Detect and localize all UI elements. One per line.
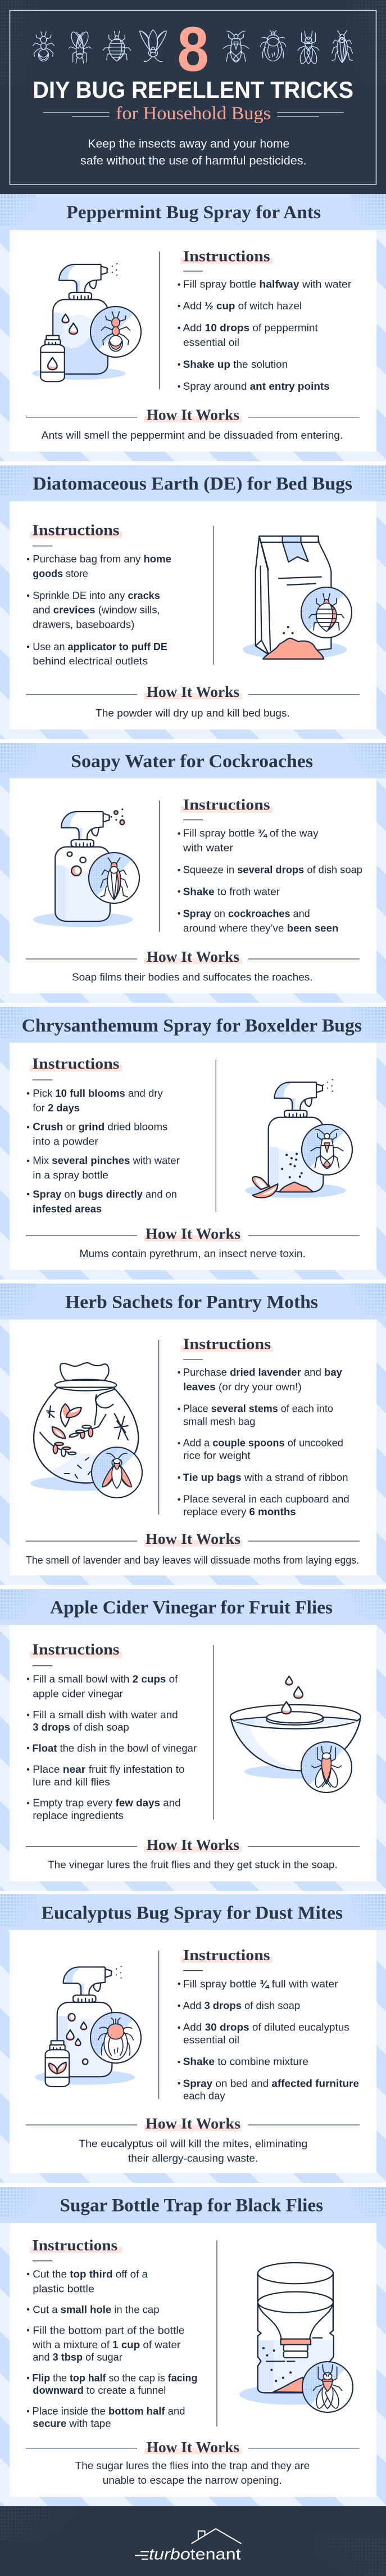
instructions block: each day — [183, 2090, 225, 2102]
instructions block: plastic bottle — [33, 2282, 94, 2294]
instructions block: small mesh bag — [183, 1415, 255, 1427]
instructions block: Fill a small bowl with 2 cups of — [33, 1673, 178, 1685]
instructions block: Spray on bed and affected furniture — [183, 2077, 359, 2089]
instructions block: Add ½ cup of witch hazel — [183, 300, 302, 312]
how it works: Ants will smell the peppermint and be dissuaded from entering. — [42, 429, 343, 441]
how it works: How It Works — [147, 2438, 239, 2456]
instructions block: Add 10 drops of peppermint — [183, 322, 319, 334]
instructions block: behind electrical outlets — [33, 655, 148, 667]
instructions block: Fill a small dish with water and — [33, 1709, 178, 1721]
instructions block: Spray on bugs directly and on — [33, 1188, 177, 1200]
instructions block — [28, 2236, 197, 2429]
instructions block: Spray on cockroaches and — [183, 907, 310, 919]
instructions block: Fill spray bottle ¾ full with water — [183, 1978, 338, 1989]
how it works: How It Works — [147, 948, 239, 965]
instructions block: lure and kill flies — [33, 1776, 110, 1787]
instructions block: downward to create a funnel — [33, 2384, 166, 2396]
instructions block: 3 drops of dish soap — [33, 1721, 129, 1733]
instructions block: Mix several pinches with water — [33, 1155, 180, 1167]
instructions block: replace ingredients — [33, 1809, 124, 1821]
instructions block: Place near fruit fly infestation to — [33, 1763, 185, 1775]
how it works: How It Works — [146, 1225, 240, 1242]
panel: eucalyptus spray for dust mites — [0, 1894, 386, 2183]
icon row: bugs — [33, 30, 352, 64]
instructions block: goods store — [33, 568, 88, 579]
illustration: bag of DE and bed bug — [243, 536, 352, 659]
illustration: spray bottle and ant — [32, 264, 141, 381]
instructions block: for 2 days — [33, 1102, 80, 1114]
instructions block: Purchase bag from any home — [33, 553, 171, 565]
panel: sugar bottle trap for black flies — [0, 2187, 386, 2506]
instructions block: Squeeze in several drops of dish soap — [183, 864, 362, 876]
how it works: The sugar lures the flies into the trap and they are — [75, 2460, 310, 2471]
title: DIY BUG REPELLENT TRICKS — [33, 76, 353, 103]
instructions block: Fill spray bottle halfway with water — [183, 278, 351, 290]
instructions block: around where they’ve been seen — [183, 922, 338, 934]
intro text: Keep the insects away and your home — [88, 137, 289, 150]
instructions block: Add 3 drops of dish soap — [183, 1999, 300, 2011]
instructions block: Shake up the solution — [183, 358, 288, 370]
instructions block: Shake to combine mixture — [183, 2056, 308, 2068]
how it works: Mums contain pyrethrum, an insect nerve toxin. — [80, 1248, 306, 1259]
panel: peppermint spray for ants — [0, 194, 386, 461]
instructions block: replace every 6 months — [183, 1506, 296, 1517]
illustration: bottle trap and black fly — [239, 2263, 353, 2412]
how it works: unable to escape the narrow opening. — [103, 2474, 282, 2486]
footer panel — [0, 2506, 386, 2576]
instructions block: and 3 tbsp of sugar — [33, 2351, 122, 2363]
how it works: The smell of lavender and bay leaves will dissuade moths from laying eggs. — [26, 1554, 359, 1566]
how it works: How It Works — [147, 406, 239, 424]
how it works: The eucalyptus oil will kill the mites, eliminating — [79, 2138, 307, 2150]
instructions block: apple cider vinegar — [33, 1687, 123, 1699]
instructions block: with a mixture of 1 cup of water — [32, 2339, 180, 2350]
section heading: Diatomaceous Earth (DE) for Bed Bugs — [33, 474, 352, 494]
instructions block: Tie up bags with a strand of ribbon — [183, 1471, 348, 1483]
instructions block — [28, 1055, 180, 1214]
intro text: safe without the use of harmful pesticides. — [80, 155, 307, 168]
how it works: How It Works — [146, 2114, 240, 2132]
subtitle with rules — [43, 103, 344, 124]
section heading: Chrysanthemum Spray for Boxelder Bugs — [22, 1016, 362, 1036]
how it works: How It Works — [147, 683, 239, 700]
instructions block — [179, 1335, 349, 1517]
instructions block: into a powder — [33, 1136, 98, 1147]
instructions block: essential oil — [183, 336, 239, 348]
subtitle with rules: for Household Bugs — [116, 103, 271, 124]
illustration: soap bottle and cockroach — [33, 809, 139, 927]
how it works — [26, 1836, 360, 1871]
instructions block: rice for weight — [183, 1449, 251, 1461]
instructions block: in a spray bottle — [33, 1169, 108, 1181]
instructions block: Float the dish in the bowl of vinegar — [32, 1742, 197, 1754]
instructions block: Crush or grind dried blooms — [33, 1121, 167, 1133]
instructions block: Add a couple spoons of uncooked — [183, 1437, 343, 1449]
instructions block — [179, 247, 351, 392]
instructions block: Cut a small hole in the cap — [33, 2303, 159, 2315]
instructions block: essential oil — [183, 2034, 239, 2046]
logo: turbotenant — [135, 2529, 242, 2563]
panel: herb sachets for pantry moths — [0, 1284, 386, 1585]
instructions block: Shake to froth water — [183, 885, 280, 897]
panel: apple cider vinegar for fruit flies — [0, 1589, 386, 1891]
instructions block: Instructions — [183, 795, 270, 813]
big number 8: 8 — [178, 14, 209, 84]
section heading: Herb Sachets for Pantry Moths — [65, 1292, 318, 1312]
instructions block — [179, 1946, 359, 2102]
how it works: their allergy-causing waste. — [128, 2152, 258, 2164]
panel: soapy water for cockroaches — [0, 743, 386, 1003]
instructions block: Instructions — [183, 1946, 270, 1963]
instructions block: secure with tape — [33, 2417, 111, 2429]
illustration: herb sachet and moth — [30, 1363, 142, 1498]
how it works: How It Works — [146, 1530, 240, 1547]
panel: chrysanthemum spray for boxelder bugs — [0, 1007, 386, 1280]
instructions block: Instructions — [32, 521, 120, 539]
how it works: The powder will dry up and kill bed bugs. — [96, 707, 290, 719]
how it works — [26, 2114, 360, 2164]
instructions block: Instructions — [32, 2236, 117, 2254]
panel: diatomaceous earth for bed bugs — [0, 465, 386, 739]
section heading: Soapy Water for Cockroaches — [71, 751, 313, 772]
instructions block: Instructions — [183, 247, 270, 264]
instructions block: Fill the bottom part of the bottle — [33, 2324, 185, 2336]
how it works — [26, 1225, 360, 1259]
how it works — [26, 406, 360, 441]
instructions block: Add 30 drops of diluted eucalyptus — [183, 2021, 349, 2033]
how it works: Soap films their bodies and suffocates the roaches. — [72, 971, 312, 983]
instructions block: Place several in each cupboard and — [183, 1493, 349, 1505]
instructions block: Instructions — [183, 1335, 271, 1352]
illustration: bowl of vinegar and fruit fly — [230, 1676, 361, 1793]
instructions block: Empty trap every few days and — [33, 1797, 181, 1809]
instructions block: Instructions — [32, 1055, 120, 1072]
instructions block: Cut the top third off of a — [33, 2268, 148, 2280]
instructions block: Flip the top half so the cap is facing — [32, 2372, 197, 2384]
section heading: Apple Cider Vinegar for Fruit Flies — [50, 1598, 333, 1618]
instructions block: Sprinkle DE into any cracks — [33, 589, 160, 601]
logo: turbotenant: turbo tenant — [149, 2546, 241, 2563]
section heading: Eucalyptus Bug Spray for Dust Mites — [42, 1903, 343, 1924]
header panel — [0, 0, 386, 194]
how it works: How It Works — [147, 1836, 239, 1853]
instructions block: leaves (or dry your own!) — [183, 1381, 302, 1393]
how it works: The vinegar lures the fruit flies and they get stuck in the soap. — [48, 1859, 338, 1871]
instructions block: Pick 10 full blooms and dry — [33, 1087, 163, 1099]
instructions block: Place inside the bottom half and — [32, 2405, 185, 2417]
instructions block: and crevices (window sills, — [33, 604, 160, 616]
instructions block: Instructions — [32, 1641, 120, 1658]
illustration: spray bottle, blooms and boxelder bug — [245, 1080, 352, 1198]
instructions block: Place several stems of each into — [183, 1403, 333, 1415]
instructions block: infested areas — [33, 1203, 102, 1214]
intro text — [80, 137, 307, 168]
instructions block: Purchase dried lavender and bay — [183, 1366, 343, 1378]
how it works — [26, 683, 360, 719]
instructions block: Fill spray bottle ¾ of the way — [183, 827, 319, 839]
how it works — [26, 948, 360, 983]
illustration: spray bottle, oil and dust mite — [35, 1966, 141, 2087]
section heading: Peppermint Bug Spray for Ants — [66, 202, 321, 223]
instructions block: drawers, baseboards) — [33, 619, 134, 631]
instructions block: Spray around ant entry points — [183, 380, 330, 392]
how it works — [26, 1530, 360, 1566]
instructions block — [28, 1641, 197, 1821]
instructions block: Use an applicator to puff DE — [33, 641, 167, 652]
how it works — [26, 2438, 360, 2486]
instructions block — [28, 521, 171, 667]
instructions block: with water — [183, 842, 233, 854]
instructions block — [179, 795, 362, 934]
section heading: Sugar Bottle Trap for Black Flies — [60, 2196, 323, 2216]
